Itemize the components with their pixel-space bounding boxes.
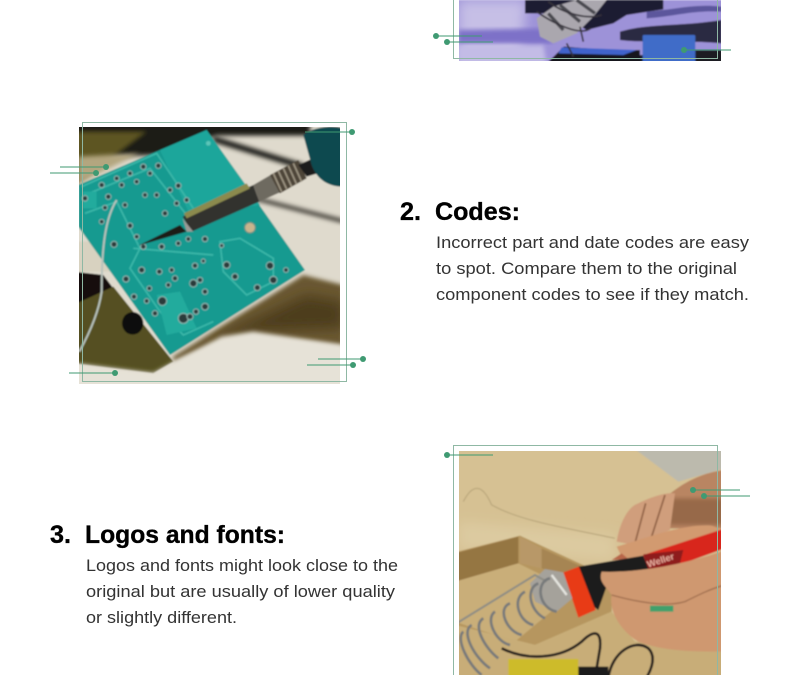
text block: logos and fonts: original but are usually of lower quality bbox=[86, 582, 396, 601]
text block: codes: Incorrect part and date codes are easy bbox=[436, 233, 750, 252]
heading: logos and fonts: 3. bbox=[50, 521, 71, 549]
text block: logos and fonts: Logos and fonts might look close to the bbox=[86, 556, 398, 575]
photo frame bbox=[454, 0, 718, 58]
photo: hands holding red soldering iron bbox=[455, 447, 725, 675]
text block: codes: to spot. Compare them to the original bbox=[436, 259, 737, 278]
photo frame bbox=[454, 446, 718, 675]
text block: codes: Codes: bbox=[435, 198, 520, 226]
panel: logos and fonts photo bbox=[444, 446, 750, 675]
photo: soldering iron on green circuit board bbox=[73, 122, 347, 388]
photo frame bbox=[82, 122, 346, 382]
text block: logos and fonts: or slightly different. bbox=[86, 608, 237, 627]
photo: soldering stand on purple background bbox=[459, 0, 721, 61]
text block: codes: component codes to see if they match. bbox=[436, 285, 749, 304]
text block: codes bbox=[400, 198, 750, 304]
callout markers bbox=[433, 33, 731, 53]
text block: logos and fonts: Logos and fonts: bbox=[85, 521, 285, 549]
photo: hands holding red soldering iron: Weller bbox=[646, 551, 676, 570]
text block: logos and fonts bbox=[50, 521, 398, 627]
panel: top soldering photo fragment bbox=[433, 0, 731, 67]
callout markers bbox=[50, 129, 366, 376]
heading: codes: 2. bbox=[400, 198, 421, 226]
callout markers bbox=[444, 452, 750, 499]
panel: codes photo bbox=[50, 122, 366, 388]
